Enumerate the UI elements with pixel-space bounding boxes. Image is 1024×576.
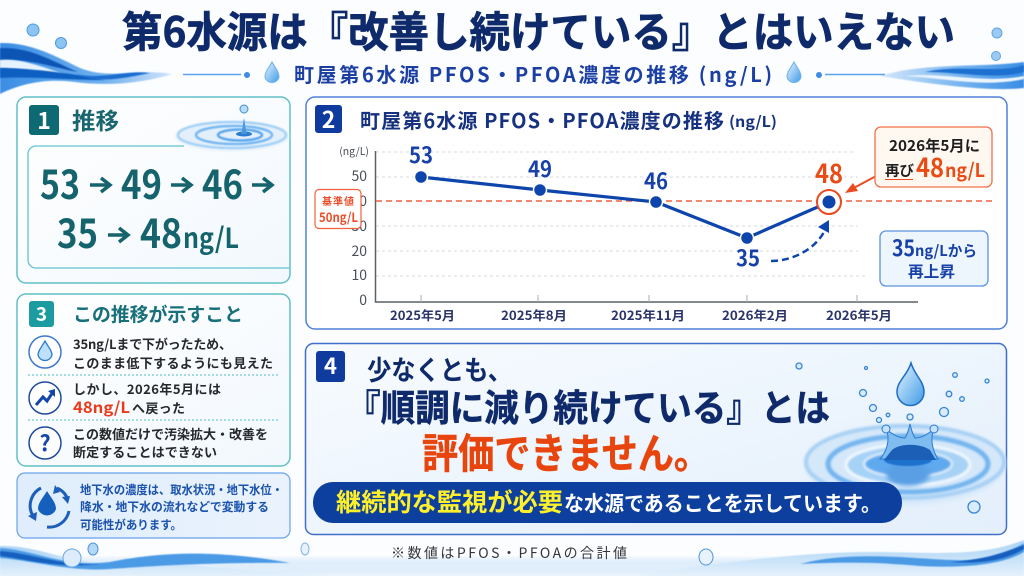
data value labels: 35 [736, 241, 760, 273]
icon: drop [29, 336, 61, 368]
text: second point [73, 379, 221, 418]
reference line [376, 200, 992, 202]
data value labels: 46 [644, 164, 668, 196]
chart axes and grid: 2025年11月 [611, 305, 685, 324]
heading: chart: 町屋第6水源 PFOS・PFOA濃度の推移 [360, 105, 724, 134]
conclusion pill: 継続的な監視が必要 [336, 483, 563, 519]
footnote: ※数値はPFOS・PFOAの合計値 [391, 543, 627, 563]
text: first point: このまま低下するようにも見えた [73, 353, 273, 372]
background wave: bottom [0, 540, 1024, 576]
icon: question: ? [39, 426, 51, 458]
chart axes and grid [339, 144, 918, 324]
badge 4: 4 [324, 349, 337, 381]
chart axes and grid: 50 [351, 166, 367, 186]
trend values line 2: ng/L [183, 217, 239, 257]
note text: 地下水の濃度は、取水状況・地下水位・ [80, 481, 283, 498]
title: 第6水源は『改善し続けている』とはいえない [122, 0, 955, 60]
panel: groundwater note [17, 473, 290, 538]
text: first point [73, 334, 273, 372]
panel 1: trend [17, 97, 290, 283]
badge 3: 3 [36, 300, 47, 327]
conclusion pill: な水源であることを示しています。 [564, 488, 881, 518]
conclusion line 1: 少なくとも、 [367, 349, 512, 388]
standard value label [315, 190, 361, 228]
icon: rising arrow [29, 382, 61, 414]
conclusion pill [313, 482, 902, 523]
chart axes and grid: 2025年8月 [501, 305, 567, 324]
standard value label: 基準値 [322, 193, 354, 208]
chart axes and grid: (ng/L) [339, 144, 369, 159]
panel 4: conclusion [306, 344, 1006, 534]
trend values line 1: 49 [121, 153, 162, 211]
trend values line 2: 48 [140, 202, 182, 260]
badge 1 [29, 102, 59, 136]
data value labels: 49 [528, 152, 552, 184]
arrow: rebound [771, 220, 829, 261]
callout: back to 48: 48 [916, 148, 944, 185]
note text: 可能性があります。 [80, 516, 182, 533]
text: second point: 48ng/L [73, 396, 130, 418]
chart axes and grid: 2025年5月 [390, 305, 455, 324]
background wave: top left [0, 24, 172, 94]
trend values line 1: 53 [40, 153, 80, 211]
subtitle: 町屋第6水源 PFOS・PFOA濃度の推移 (ng/L) [294, 59, 772, 88]
chart axes and grid: 30 [351, 216, 367, 236]
trend values line 1: 46 [202, 153, 243, 211]
callout: back to 48: 再び [885, 160, 914, 181]
badge 1: 1 [37, 102, 51, 136]
chart axes and grid: 2026年5月 [826, 305, 892, 324]
chart axes and grid: 2026年2月 [722, 305, 788, 324]
badge 3 [29, 300, 54, 327]
badge 4 [316, 349, 345, 382]
data value labels: 53 [409, 138, 433, 170]
heading: what it shows: この推移が示すこと [73, 300, 243, 327]
trend values line 2: 35 [57, 202, 98, 260]
icon: water ripple [175, 105, 289, 151]
background wave: top right [880, 28, 1024, 89]
chart axes and grid: 0 [359, 290, 367, 310]
chart axes and grid: 40 [351, 191, 367, 211]
callout: rebound from 35: 再上昇 [908, 260, 955, 282]
subtitle [183, 59, 885, 88]
inner value box [28, 146, 290, 268]
badge 2 [315, 101, 342, 135]
callout: rebound from 35: ng/Lから [915, 240, 977, 261]
trend values line 1 [40, 153, 272, 211]
panel 2: line chart [306, 97, 1007, 329]
text: third point [73, 424, 268, 461]
panel 3: what the trend shows [17, 294, 290, 466]
callout: rebound from 35: 35 [892, 231, 915, 263]
trend values line 2 [57, 202, 239, 260]
text: first point: 35ng/Lまで下がったため、 [73, 334, 232, 353]
callout: back to 48: 2026年5月に [889, 135, 980, 156]
icon: question [29, 426, 61, 459]
conclusion line 2: 『順調に減り続けている』とは [346, 378, 830, 432]
callout: rebound from 35 [880, 231, 988, 286]
text: third point: この数値だけで汚染拡大・改善を [73, 424, 268, 443]
callout: back to 48 [875, 127, 992, 187]
note text: 降水・地下水の流れなどで変動する [80, 498, 269, 515]
data value labels: 48 [815, 154, 843, 191]
badge 2: 2 [322, 101, 335, 135]
heading: trend: 推移 [72, 102, 119, 136]
standard value label: 50ng/L [319, 207, 358, 226]
text: third point: 断定することはできない [73, 442, 217, 461]
data value labels [409, 138, 843, 273]
heading: chart: (ng/L) [729, 111, 777, 132]
data line [414, 170, 841, 244]
text: second point: へ戻った [132, 398, 185, 417]
icon: water cycle [28, 485, 70, 527]
callout: back to 48: ng/L [945, 156, 985, 183]
chart axes and grid: 10 [351, 265, 367, 285]
text: second point: しかし、2026年5月には [73, 379, 221, 398]
note text [80, 481, 283, 533]
chart axes and grid: 20 [351, 241, 367, 261]
conclusion line 3: 評価できません。 [422, 420, 710, 480]
arrow: callout to point [845, 175, 878, 193]
illustration: water splash [796, 363, 1005, 513]
